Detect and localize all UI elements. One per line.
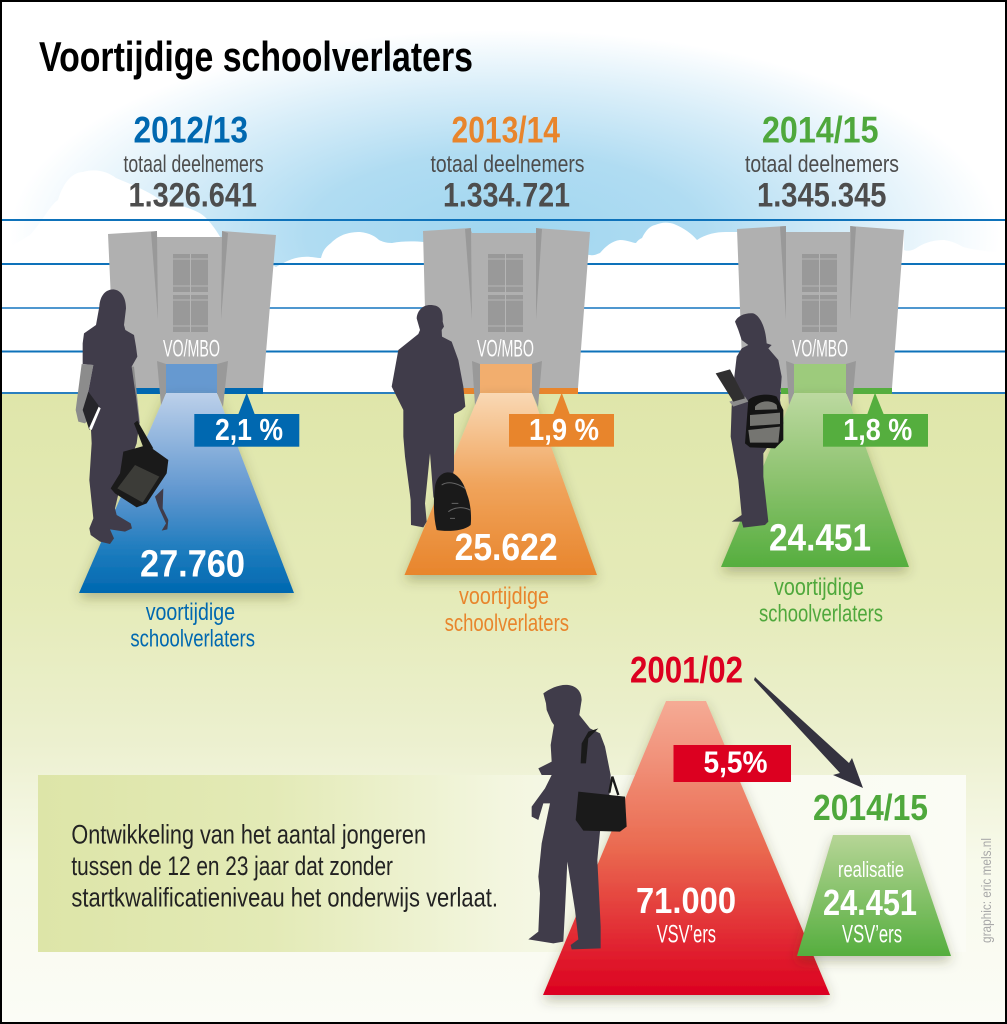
percentage callout 5,5% [674, 744, 791, 782]
heading: year 2012/13: 2012/13 [134, 110, 248, 150]
label: voortijdige schoolverlaters: schoolverlaters [130, 626, 255, 653]
text block: development description: tussen de 12 en 23 jaar dat zonder [71, 851, 393, 881]
title: Voortijdige schoolverlaters [39, 33, 473, 80]
label: totaal deelnemers: totaal deelnemers [745, 151, 899, 178]
percentage callout 1,9 %: 1,9 % [529, 412, 599, 447]
number: 24.451: 24.451 [769, 518, 871, 560]
label: realisatie: realisatie [838, 857, 904, 882]
road trapezoid [721, 393, 909, 567]
label: voortijdige schoolverlaters [759, 574, 883, 628]
label: voortijdige schoolverlaters [445, 583, 569, 637]
percentage callout 2,1 % [194, 393, 299, 447]
number: 25.622: 25.622 [455, 527, 558, 569]
percentage callout 2,1 %: 2,1 % [215, 412, 283, 447]
label: totaal deelnemers: totaal deelnemers [430, 151, 584, 178]
panel: 2013/14 [392, 110, 614, 637]
credit: graphic: eric mels.nl [979, 838, 994, 943]
percentage callout 5,5%: 5,5% [704, 744, 768, 780]
percentage callout 1,8 % [823, 393, 928, 447]
building [423, 228, 590, 394]
building [737, 226, 904, 394]
text block: development description: startkwalificatieniveau het onderwijs verlaat. [71, 883, 498, 913]
label: voortijdige schoolverlaters: schoolverlaters [759, 601, 883, 628]
panel: 2012/13 [76, 110, 299, 653]
percentage callout 1,9 % [509, 393, 614, 447]
horizontal rule lines [0, 219, 1007, 394]
door jambs [157, 361, 228, 407]
text block: development description: Ontwikkeling van het aantal jongeren [71, 819, 426, 849]
building [108, 231, 276, 394]
heading: year 2014/15: 2014/15 [762, 110, 878, 150]
number: total participants: 1.334.721 [443, 176, 570, 214]
road trapezoid [79, 393, 294, 593]
clouds [0, 170, 1007, 393]
road trapezoid [404, 393, 597, 575]
label: voortijdige schoolverlaters [130, 599, 255, 653]
number: 27.760: 27.760 [140, 544, 245, 586]
green trapezoid [797, 835, 951, 956]
sky glow [0, 20, 1007, 393]
door jambs [472, 361, 542, 407]
label: totaal deelnemers: totaal deelnemers [124, 151, 264, 178]
door jambs [786, 361, 856, 407]
panel: 2001/02 comparison [528, 650, 830, 995]
heading: year 2001/02: 2001/02 [630, 650, 743, 691]
person: student with shoulder bag [528, 685, 627, 949]
label: voortijdige schoolverlaters: voortijdige [459, 583, 549, 610]
label: VO/MBO: VO/MBO [163, 336, 220, 362]
ground [0, 393, 1007, 1024]
person: man with backpack [392, 305, 471, 531]
percentage callout 1,8 %: 1,8 % [843, 412, 912, 447]
person: girl with tablet and backpack [716, 313, 783, 528]
panel: 2014/15 [716, 110, 928, 628]
person: woman with bag [76, 289, 168, 544]
arrow: 2001/02 to 2014/15 [754, 677, 863, 788]
label: voortijdige schoolverlaters: voortijdige [774, 574, 864, 601]
label: VSV'ers: VSV’ers [842, 921, 902, 949]
text block: development description [71, 819, 498, 913]
label: VO/MBO: VO/MBO [477, 336, 534, 362]
heading: year 2014/15: 2014/15 [813, 787, 928, 828]
number: total participants: 1.326.641 [128, 176, 257, 214]
panel: development band [38, 775, 966, 952]
red trapezoid [543, 701, 830, 995]
number: 24.451: 24.451 [823, 882, 917, 923]
label: voortijdige schoolverlaters: schoolverlaters [445, 610, 569, 637]
label: voortijdige schoolverlaters: voortijdige [146, 599, 235, 626]
label: VSV'ers: VSV’ers [657, 921, 716, 949]
panel: 2014/15 realisation [797, 787, 951, 956]
number: 71.000: 71.000 [636, 880, 736, 921]
number: total participants: 1.345.345 [757, 176, 886, 214]
heading: year 2013/14: 2013/14 [452, 110, 560, 150]
label: VO/MBO: VO/MBO [792, 336, 848, 362]
